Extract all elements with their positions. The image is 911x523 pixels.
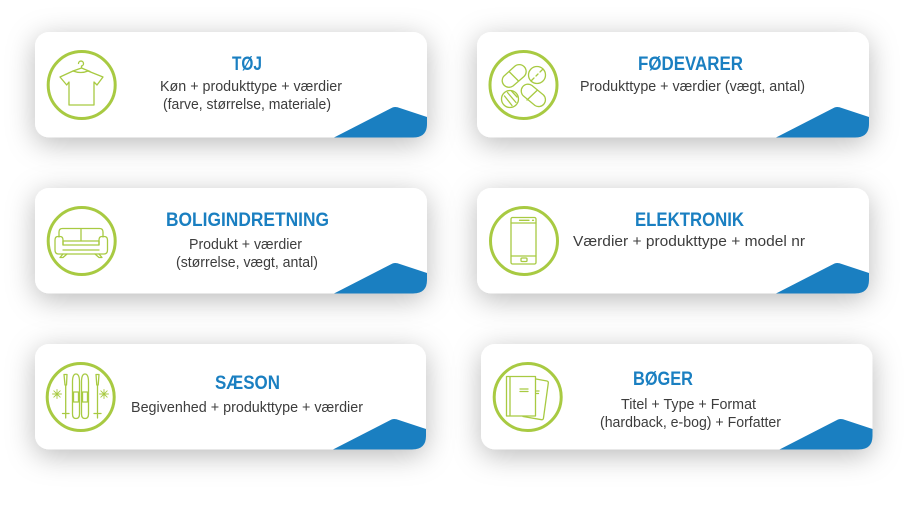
icon: smartphone <box>490 208 558 274</box>
panel: BOLIGINDRETNING <box>35 188 427 294</box>
corner accent: BØGER <box>780 419 872 450</box>
corner accent: BOLIGINDRETNING <box>334 263 427 294</box>
panel: FØDEVARER <box>477 32 869 138</box>
text: TØJ description: Køn + produkttype + værdier <box>160 78 342 95</box>
heading: BOLIGINDRETNING: BOLIGINDRETNING <box>166 210 329 231</box>
heading: ELEKTRONIK: ELEKTRONIK <box>635 210 744 231</box>
panel: SÆSON <box>35 344 426 450</box>
text: BØGER description: (hardback, e-bog) + Forfatter <box>600 414 781 431</box>
text: BØGER description: Titel + Type + Format <box>621 396 757 413</box>
heading: BØGER: BØGER <box>633 369 693 390</box>
text: TØJ description <box>160 78 342 113</box>
icon: t-shirt on hanger <box>48 52 115 118</box>
text: FØDEVARER description: Produkttype + værdier (vægt, antal) <box>580 78 805 95</box>
corner accent: SÆSON <box>333 419 426 450</box>
text: BOLIGINDRETNING description <box>176 236 318 271</box>
text: BOLIGINDRETNING description: Produkt + værdier <box>189 236 302 253</box>
corner accent: FØDEVARER <box>776 107 869 138</box>
icon: books <box>494 364 561 430</box>
panel: BØGER <box>481 344 872 450</box>
text: SÆSON description: Begivenhed + produkttype + værdier <box>131 399 363 416</box>
text: BØGER description <box>600 396 781 431</box>
corner accent: TØJ <box>334 107 427 138</box>
heading: TØJ: TØJ <box>232 54 262 75</box>
text: BOLIGINDRETNING description: (størrelse, vægt, antal) <box>176 254 318 271</box>
heading: SÆSON: SÆSON <box>215 373 280 394</box>
text: TØJ description: (farve, størrelse, materiale) <box>163 96 331 113</box>
panel: ELEKTRONIK <box>477 188 869 294</box>
corner accent: ELEKTRONIK <box>776 263 869 294</box>
icon: sofa <box>48 208 115 274</box>
heading: FØDEVARER: FØDEVARER <box>638 54 743 75</box>
icon: pills <box>490 52 557 118</box>
icon: skis, poles and snowflakes <box>47 364 114 430</box>
panel: TØJ <box>35 32 427 138</box>
text: ELEKTRONIK description: Værdier + produkttype + model nr <box>573 233 805 250</box>
